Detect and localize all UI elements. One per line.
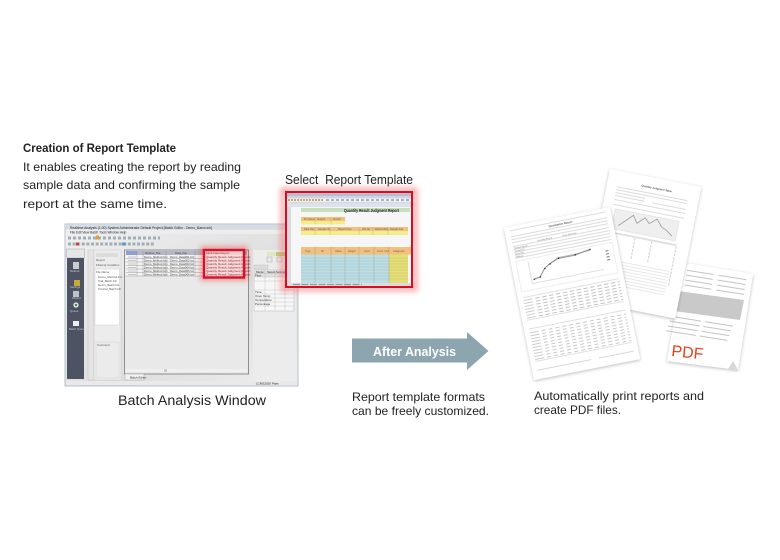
caption: report template formats: Report template formats	[352, 390, 485, 404]
red frame	[286, 192, 412, 287]
left navigation sidebar: Queue	[70, 309, 79, 313]
info table two: Sample ID	[318, 228, 330, 231]
batch table panel: Demo_Data006.lcd	[170, 272, 194, 276]
info table one: Vendor	[333, 218, 341, 221]
description body	[23, 160, 241, 211]
batch table panel: Demo_Data005.lcd	[170, 269, 194, 273]
results table: Height	[348, 249, 356, 253]
results table: Type	[305, 249, 311, 253]
chart	[611, 209, 679, 241]
status bar	[66, 381, 297, 386]
results table: ARea	[335, 249, 342, 253]
results table	[301, 247, 411, 283]
info table one: Analyst	[317, 218, 326, 221]
heading: creation of report template: Creation of Report Template	[23, 143, 176, 155]
report template screenshot	[283, 190, 415, 289]
highlight: report column: Quantity Result Judgment Report	[206, 258, 251, 262]
caption: automatically print reports: create PDF files.	[534, 403, 621, 417]
report title band: Quantity Result Judgment Report	[344, 208, 399, 213]
grey image block	[674, 291, 744, 320]
batch table panel: Demo_Data001.lcd	[170, 255, 194, 259]
description text block	[23, 143, 241, 211]
right parameter panel: Select	[267, 270, 276, 274]
info table one	[301, 217, 345, 224]
text lines	[666, 269, 746, 342]
batch editor tab: Batch Editor	[130, 376, 146, 380]
toolbars	[66, 230, 297, 246]
caption: report template formats	[352, 390, 489, 418]
toolbars: File Edit View Batch Tools Window Help	[70, 230, 126, 234]
left navigation sidebar: Method	[70, 269, 80, 273]
document: front report with curve chart: Quantity Result	[537, 236, 552, 242]
file list panel: Tutorial_Batch.lcb	[98, 287, 121, 291]
caption: report template formats: can be freely customized.	[352, 404, 489, 418]
results table: Conc	[364, 249, 371, 253]
highlight: report column: Quantity Result Judgment Report	[206, 272, 251, 276]
right parameter panel: Oven Temp	[255, 294, 271, 298]
batch table panel: Demo_Data002.lcd	[170, 258, 194, 262]
document: front report with curve chart: Sample Name	[514, 245, 529, 250]
description body: report at the same time.	[23, 197, 167, 211]
file list panel: Demo_Batch.lcb	[98, 283, 120, 287]
results table: ID	[321, 249, 324, 253]
window title bar: Realtime Analysis (1.00) System Administrator Default Project [Batch Editor - Demo_Batch.lcb]	[70, 226, 212, 230]
info table two: Sample File	[390, 228, 404, 231]
batch table panel: Demo_Method.lcm	[144, 255, 168, 259]
spreadsheet toolbar	[287, 193, 411, 207]
right parameter panel: Setting	[276, 270, 286, 274]
arrow: after analysis	[352, 332, 488, 370]
info table two: Method File	[375, 228, 389, 231]
batch table panel: Demo_Data004.lcd	[170, 266, 194, 270]
right parameter panel	[253, 250, 296, 381]
file list panel: Filtering Condition	[96, 263, 120, 267]
results table: Conc. Unit	[377, 249, 389, 253]
file list panel: File Name	[96, 270, 110, 274]
label: select report template: Select Report Template	[285, 173, 413, 187]
batch table panel: Method_File	[145, 251, 161, 255]
batch table panel: Demo_Method.lcm	[144, 262, 168, 266]
document: front report with curve chart	[504, 207, 640, 380]
caption: automatically print reports	[534, 389, 704, 417]
label: batch analysis window: Batch Analysis Window	[118, 393, 266, 408]
left navigation sidebar	[66, 249, 86, 379]
data columns	[598, 231, 677, 295]
document: back report with line chart	[584, 169, 701, 319]
document: front report with curve chart: Quantitative Report	[548, 220, 573, 228]
footer lines	[537, 351, 633, 370]
right parameter panel: Percentage	[255, 302, 271, 306]
PDF label: PDF	[671, 343, 704, 363]
left navigation sidebar: Batch Queue	[69, 327, 86, 331]
file list panel	[88, 250, 123, 380]
window title bar	[66, 225, 297, 230]
description body: It enables creating the report by reading	[23, 160, 241, 174]
sheet tabs	[287, 283, 411, 286]
page fold	[728, 361, 738, 370]
info table two: Data File	[304, 228, 315, 231]
batch table panel: Demo_Method.lcm	[144, 258, 168, 262]
arrow: after analysis: After Analysis	[373, 345, 456, 359]
left navigation sidebar: Wizard	[72, 296, 81, 300]
data table two	[542, 314, 631, 357]
highlight: report column: Quantity Result Judgment Report	[206, 269, 251, 273]
highlight: report column: Quantity Result Judgment Report	[206, 255, 251, 259]
spreadsheet row headers	[287, 207, 291, 283]
document: front report with curve chart: Data File	[515, 251, 525, 256]
left navigation sidebar: Settings	[70, 285, 81, 289]
info table two: Vial No.	[362, 228, 371, 231]
document: front report with curve chart: Data Filename	[562, 231, 578, 237]
highlight: report column: Multi-Data Report	[206, 251, 230, 255]
caption: automatically print reports: Automatically print reports and	[534, 389, 704, 403]
info table one: PC Name	[304, 218, 315, 221]
batch table panel: Demo_Method.lcm	[144, 266, 168, 270]
status bar: LCMS2020 Pass	[256, 382, 279, 386]
document: PDF page	[666, 263, 753, 370]
document: front report with curve chart: Method	[516, 254, 524, 259]
highlight: report column: Quantity Result Judgment Report	[206, 266, 251, 270]
header lines	[510, 212, 611, 258]
right parameter panel: Mode	[256, 270, 264, 274]
file list panel: Comment	[97, 343, 110, 347]
right parameter panel: Flow	[255, 274, 262, 278]
highlight: report column	[203, 249, 251, 278]
highlight: report column: Quantity Result Judgment Report	[206, 262, 251, 266]
right parameter panel: Temperature	[255, 298, 272, 302]
right parameter panel: Time	[255, 290, 262, 294]
calibration chart	[516, 242, 618, 292]
header lines	[613, 187, 687, 218]
batch table panel	[124, 250, 248, 374]
batch editor tab	[125, 374, 146, 380]
batch table panel: Demo_Data003.lcd	[170, 262, 194, 266]
document: front report with curve chart: Sample ID	[515, 249, 525, 253]
info table two	[301, 227, 408, 235]
info table two: Report Time	[338, 228, 352, 231]
batch table panel: Data_File	[175, 251, 187, 255]
batch analysis window screenshot	[65, 224, 298, 386]
file list panel: Demo_Method.lcm	[98, 275, 123, 279]
results table: Judgment	[393, 249, 405, 253]
description body: sample data and confirming the sample	[23, 178, 240, 192]
file list panel: ICal_Batch.lcb	[98, 279, 117, 283]
file list panel: Report	[96, 258, 105, 262]
data table one	[535, 282, 623, 316]
batch table panel: Demo_Method.lcm	[144, 272, 168, 276]
batch table panel: Demo_Method.lcm	[144, 269, 168, 273]
document: back report with line chart: Quantity Judgment Table	[641, 183, 673, 193]
